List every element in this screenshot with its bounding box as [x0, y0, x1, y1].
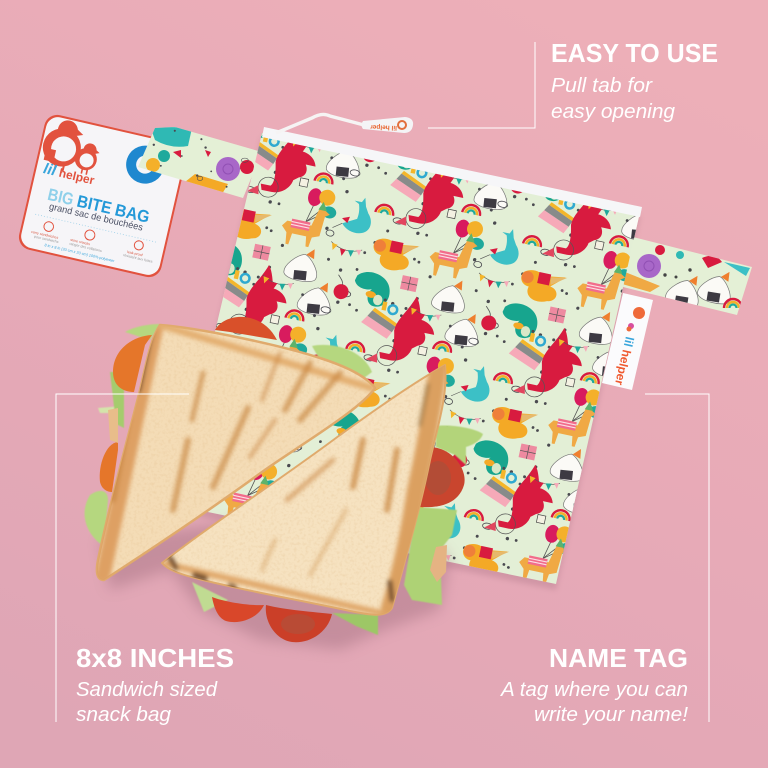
description: snack bag: [76, 704, 171, 726]
zipper: [262, 127, 642, 217]
bread slice: upper left: [90, 320, 380, 585]
callout: easy to use: [428, 38, 718, 128]
brand name: lil: [42, 160, 59, 180]
product title: [44, 185, 151, 235]
feature icons and captions: ranger des collations: [69, 242, 102, 253]
feature icons and captions: carry sandwiches: [31, 230, 59, 240]
zipper pull: lil helper: [370, 123, 397, 131]
product title: BIG: [46, 185, 75, 209]
feature icons and captions: résistant aux fuites: [123, 253, 153, 264]
hang tag card: [16, 112, 190, 280]
product title: BAG: [113, 200, 151, 227]
fabric name tag: [602, 293, 653, 390]
description: A tag where you can: [500, 679, 688, 701]
description: [500, 679, 688, 726]
callout: name tag: [500, 394, 709, 726]
sandwich: [85, 317, 483, 650]
bread slice: lower right: [155, 360, 450, 620]
logo birds: [38, 116, 105, 178]
lettuce: [85, 324, 483, 635]
feature icons and captions: [30, 217, 157, 266]
bag body with party animal print: [208, 133, 639, 584]
size note: 8 in x 8 in (20 cm x 20 cm) 100% polyester: [44, 243, 116, 263]
sandwich shadow: [100, 500, 450, 650]
description: easy opening: [551, 101, 675, 123]
description: [76, 679, 218, 726]
zipper pull: [276, 114, 413, 133]
product: snack bag: [138, 112, 752, 590]
callout: 8x8 inches: [56, 394, 234, 726]
leader line to zipper pull: [428, 42, 535, 128]
leader line to sandwich: [56, 394, 189, 722]
bottom slices peeking out: [108, 408, 118, 443]
hang tag card: helper: [58, 166, 96, 188]
feature icons and captions: pour sandwichs: [34, 235, 59, 244]
heading: 8x8 INCHES: [76, 643, 234, 673]
feature icons and captions: leak-proof: [127, 250, 143, 257]
right strap with snap: [620, 237, 752, 315]
left strap with snap: [138, 127, 258, 198]
description: [551, 75, 675, 123]
product title: grand sac de bouchées: [48, 201, 144, 234]
leader line to fabric tag: [645, 394, 709, 722]
heading: EASY TO USE: [551, 38, 718, 68]
dotted divider: [35, 214, 158, 243]
description: write your name!: [534, 704, 688, 726]
fabric name tag: lil helper: [612, 335, 637, 387]
bag shadow: [174, 137, 640, 590]
feature icons and captions: store snacks: [70, 238, 91, 246]
product title: BITE: [75, 192, 113, 218]
description: Pull tab for: [551, 75, 653, 97]
tag eyelet sticker: [122, 142, 168, 187]
heading: NAME TAG: [549, 643, 688, 673]
description: Sandwich sized: [76, 679, 218, 701]
tomatoes: [100, 317, 465, 642]
